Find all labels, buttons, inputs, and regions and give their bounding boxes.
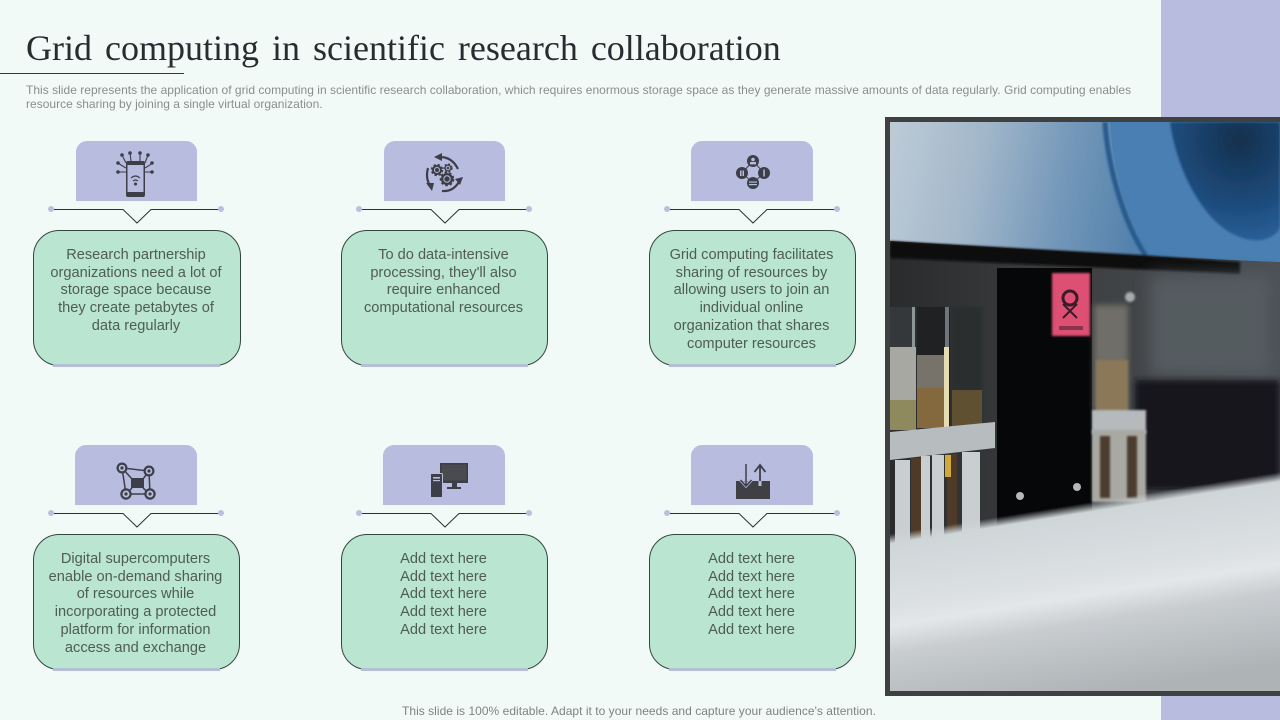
card text (341, 230, 548, 366)
panel: digital supercomputers (33, 445, 240, 671)
card text: Add text here (708, 604, 795, 620)
icon tab: upload and download tray (691, 445, 813, 505)
biohazard label (1052, 273, 1090, 336)
footer note: This slide is 100% editable. Adapt it to your needs and capture your audience's attention. (402, 704, 876, 718)
card underline (669, 364, 836, 367)
card text: Add text here (708, 569, 795, 585)
card text: computational resources (364, 300, 523, 316)
card text: platform for information (60, 622, 211, 638)
title: Grid computing in scientific research collaboration (26, 28, 781, 68)
rack (890, 422, 995, 460)
description: This slide represents the application of grid computing in scientific research collaboration, which requires enormous storage space as they generate massive amounts of data regularly. Grid computing enables resource sharing by joining a single virtual organization. (26, 83, 1131, 110)
card text: Add text here (708, 551, 795, 567)
icon tab: smartphone network (76, 141, 197, 201)
card text: To do data-intensive (378, 247, 509, 263)
card underline (361, 668, 528, 671)
card text: Research partnership (66, 247, 206, 263)
title underline (0, 73, 184, 74)
connector (356, 206, 532, 224)
card text: sharing of resources by (676, 265, 827, 281)
card underline (361, 364, 528, 367)
card text: individual online (700, 300, 803, 316)
card text: access and exchange (65, 640, 206, 656)
card text (33, 230, 241, 366)
card underline (53, 668, 220, 671)
connector (48, 206, 224, 224)
panel: resource sharing (649, 141, 856, 367)
card text: they create petabytes of (58, 300, 214, 316)
card text: organizations need a lot of (50, 265, 222, 281)
card text: enable on-demand sharing (49, 569, 222, 585)
card text: Add text here (400, 622, 487, 638)
card text: Add text here (708, 622, 795, 638)
card text: computer resources (687, 336, 816, 352)
card text: Add text here (400, 604, 487, 620)
dark band (890, 241, 1240, 274)
panel: add text two (649, 445, 856, 671)
card text: Add text here (708, 586, 795, 602)
icon tab: gears cycle (384, 141, 505, 201)
card text: incorporating a protected (55, 604, 216, 620)
card text: Grid computing facilitates (670, 247, 833, 263)
panel: research partnerships (33, 141, 241, 367)
panel: add text one (341, 445, 548, 671)
card text: allowing users to join an (674, 282, 829, 298)
card text: organization that shares (674, 318, 829, 334)
card text: of resources while (77, 586, 194, 602)
connector (664, 510, 840, 528)
icon tab: user network with folder (75, 445, 197, 505)
black panel (997, 268, 1092, 533)
back tube (1094, 305, 1128, 410)
card text: storage space because (61, 282, 211, 298)
blue cylinder (890, 122, 1280, 262)
icon tab: desktop computer (383, 445, 505, 505)
connector (664, 206, 840, 224)
card text: Add text here (400, 569, 487, 585)
right accent strip (1161, 0, 1280, 720)
card text (33, 534, 240, 670)
panel: data-intensive processing (341, 141, 548, 367)
card underline (669, 668, 836, 671)
card text: Digital supercomputers (61, 551, 210, 567)
card text: Add text here (400, 551, 487, 567)
photo: laboratory test tubes (885, 117, 1280, 696)
connector (356, 510, 532, 528)
connector (48, 510, 224, 528)
card underline (53, 364, 220, 367)
card text: require enhanced (387, 282, 500, 298)
card text: Add text here (400, 586, 487, 602)
card text (341, 534, 548, 670)
icon tab: connected circles (691, 141, 813, 201)
white bench (890, 465, 1280, 691)
card text (649, 230, 856, 366)
front tubes (890, 307, 912, 347)
card text: data regularly (92, 318, 180, 334)
card text: processing, they'll also (370, 265, 517, 281)
card text (649, 534, 856, 670)
